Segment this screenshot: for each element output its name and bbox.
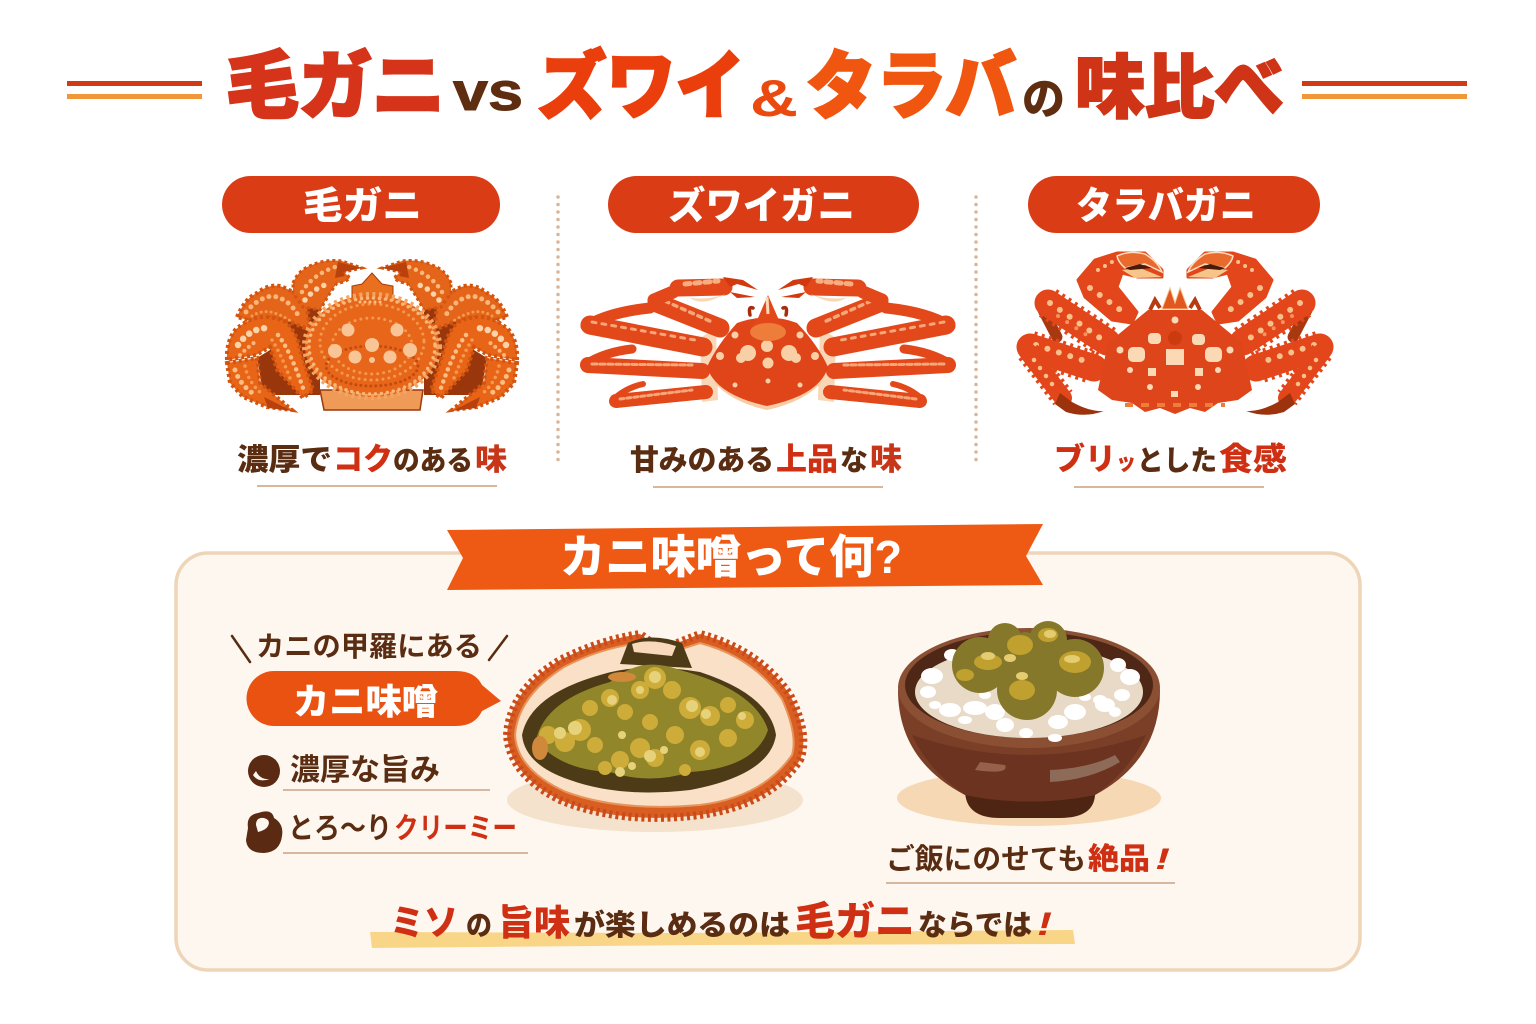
leg 3 xyxy=(613,384,643,400)
carapace xyxy=(712,380,824,410)
caption: タラバガニ: 食感 xyxy=(1219,441,1287,477)
icon: round drop xyxy=(248,755,280,787)
highlighted conclusion: 旨味 xyxy=(498,902,570,943)
title xyxy=(67,45,1467,128)
pill heading: 毛ガニ xyxy=(222,176,500,233)
feature item: とろ〜りクリーミー: クリーミー xyxy=(394,813,517,845)
feature item: 濃厚な旨み xyxy=(248,754,490,791)
caption: ご飯にのせても絶品! xyxy=(886,842,1175,884)
icon: king crab xyxy=(1028,252,1322,415)
caption: ズワイガニ: な xyxy=(840,445,868,476)
pill heading: タラバガニ xyxy=(1028,176,1320,233)
caption: 毛ガニ: コク xyxy=(333,442,393,477)
column: タラバガニ xyxy=(1028,176,1322,488)
highlighted conclusion: ミソ xyxy=(390,902,458,943)
title decoration right xyxy=(1302,81,1467,99)
title: 味比べ xyxy=(1075,49,1284,127)
caption: ご飯にのせても絶品!: ! xyxy=(1155,843,1170,876)
pale leg joints xyxy=(700,328,718,402)
icon: rice bowl with miso xyxy=(897,621,1161,826)
feature item: 濃厚な旨み: 濃厚な旨み xyxy=(290,754,440,787)
leg 1 xyxy=(586,308,650,326)
leg 2 xyxy=(1030,347,1094,368)
caption: タラバガニ xyxy=(1054,441,1287,488)
highlight stripe xyxy=(370,930,1075,948)
caption: タラバガニ: ブリ xyxy=(1054,442,1116,477)
title: vs xyxy=(453,62,523,122)
caption: ズワイガニ: 上品 xyxy=(776,442,838,477)
caption: タラバガニ: とした xyxy=(1137,445,1217,476)
claw xyxy=(657,303,720,328)
highlighted conclusion xyxy=(370,900,1075,948)
callout badge: カニ味噌: カニ味噌 xyxy=(293,681,438,722)
ribbon heading: カニ味噌って何? xyxy=(560,531,902,583)
dark under-body xyxy=(257,300,320,395)
feature item: とろ〜りクリーミー: とろ〜り xyxy=(288,813,392,845)
highlighted conclusion: ならでは xyxy=(918,910,1032,942)
pill heading: ズワイガニ: ズワイガニ xyxy=(668,185,855,228)
caption: 毛ガニ xyxy=(237,442,507,487)
caption: ご飯にのせても絶品!: 絶品 xyxy=(1088,843,1150,876)
title: ズワイ xyxy=(537,45,745,128)
claw xyxy=(293,260,362,310)
ribbon heading xyxy=(447,524,1043,590)
panel: カニ味噌 xyxy=(176,524,1360,970)
icon: snow crab xyxy=(586,277,950,410)
middle leg xyxy=(227,317,313,398)
caption: ズワイガニ xyxy=(630,442,902,488)
column: 毛ガニ xyxy=(222,176,517,487)
caption: 毛ガニ: 濃厚で xyxy=(237,444,332,477)
caption: 毛ガニ: 味 xyxy=(475,444,507,477)
highlighted conclusion: 毛ガニ xyxy=(795,900,915,944)
caption: ズワイガニ: 甘みのある xyxy=(630,444,774,477)
highlighted conclusion: の xyxy=(466,910,492,941)
claw xyxy=(1078,253,1162,323)
leg 1 xyxy=(1043,310,1057,337)
title: 毛ガニ xyxy=(226,45,445,128)
title: タラバ xyxy=(806,45,1016,128)
caption: タラバガニ: ッ xyxy=(1116,450,1136,475)
caption: 毛ガニ: のある xyxy=(393,445,473,476)
callout badge: カニ味噌 xyxy=(246,671,501,726)
dotted divider 2 xyxy=(974,197,978,467)
pill heading: ズワイガニ xyxy=(608,176,919,233)
title decoration left xyxy=(67,81,202,99)
caption: ズワイガニ: 味 xyxy=(870,442,902,477)
icon: crab shell with miso xyxy=(507,634,803,832)
leg 2 xyxy=(586,349,632,364)
title: の xyxy=(1022,75,1065,124)
upper leg xyxy=(237,286,310,330)
caption: ご飯にのせても絶品!: ご飯にのせても xyxy=(886,842,1086,876)
miso lobes xyxy=(952,621,1104,720)
highlighted conclusion: が楽しめるのは xyxy=(574,908,790,942)
title: & xyxy=(750,70,798,128)
carapace xyxy=(352,273,393,298)
feature item: とろ〜りクリーミー xyxy=(246,811,528,854)
carapace xyxy=(1098,310,1252,414)
pill heading: 毛ガニ: 毛ガニ xyxy=(303,186,422,228)
highlighted conclusion: ! xyxy=(1037,906,1052,942)
icon: hairy crab xyxy=(227,260,517,411)
icon: creamy blob xyxy=(246,811,282,853)
text block: カニの甲羅にある: カニの甲羅にある xyxy=(256,631,482,662)
lower leg xyxy=(227,358,292,410)
column: ズワイガニ xyxy=(586,176,950,488)
pill heading: タラバガニ: タラバガニ xyxy=(1076,186,1256,228)
dotted divider 1 xyxy=(556,197,560,467)
